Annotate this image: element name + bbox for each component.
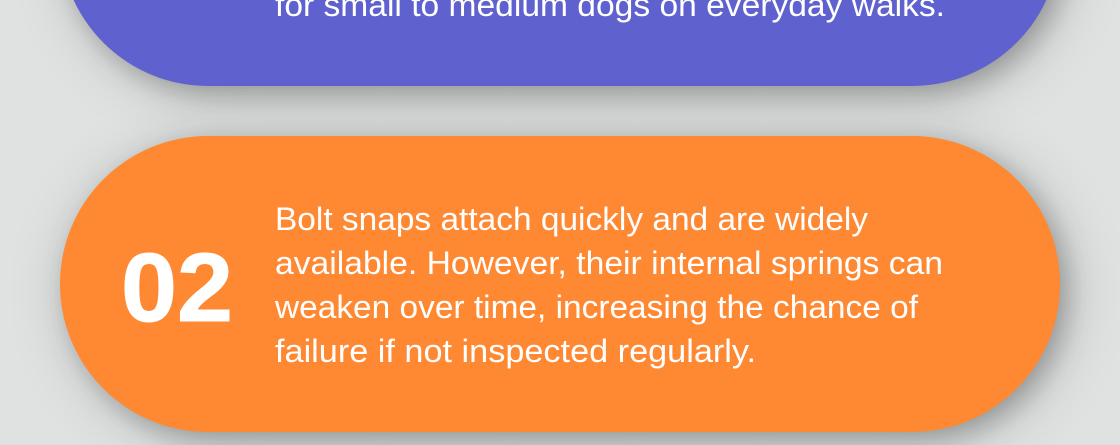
text block: orange card description (274, 201, 943, 369)
number: 02: 02 (121, 233, 233, 342)
panel: orange card 02 (60, 136, 1060, 432)
text block: orange card description: available. However, their internal springs can (275, 245, 943, 281)
text block: orange card description: weaken over time, increasing the chance of (274, 289, 918, 325)
panel: purple card 01 (cropped at top) (60, 0, 1060, 86)
text block: orange card description: failure if not inspected regularly. (275, 333, 756, 369)
text block: orange card description: Bolt snaps attach quickly and are widely (275, 201, 868, 237)
